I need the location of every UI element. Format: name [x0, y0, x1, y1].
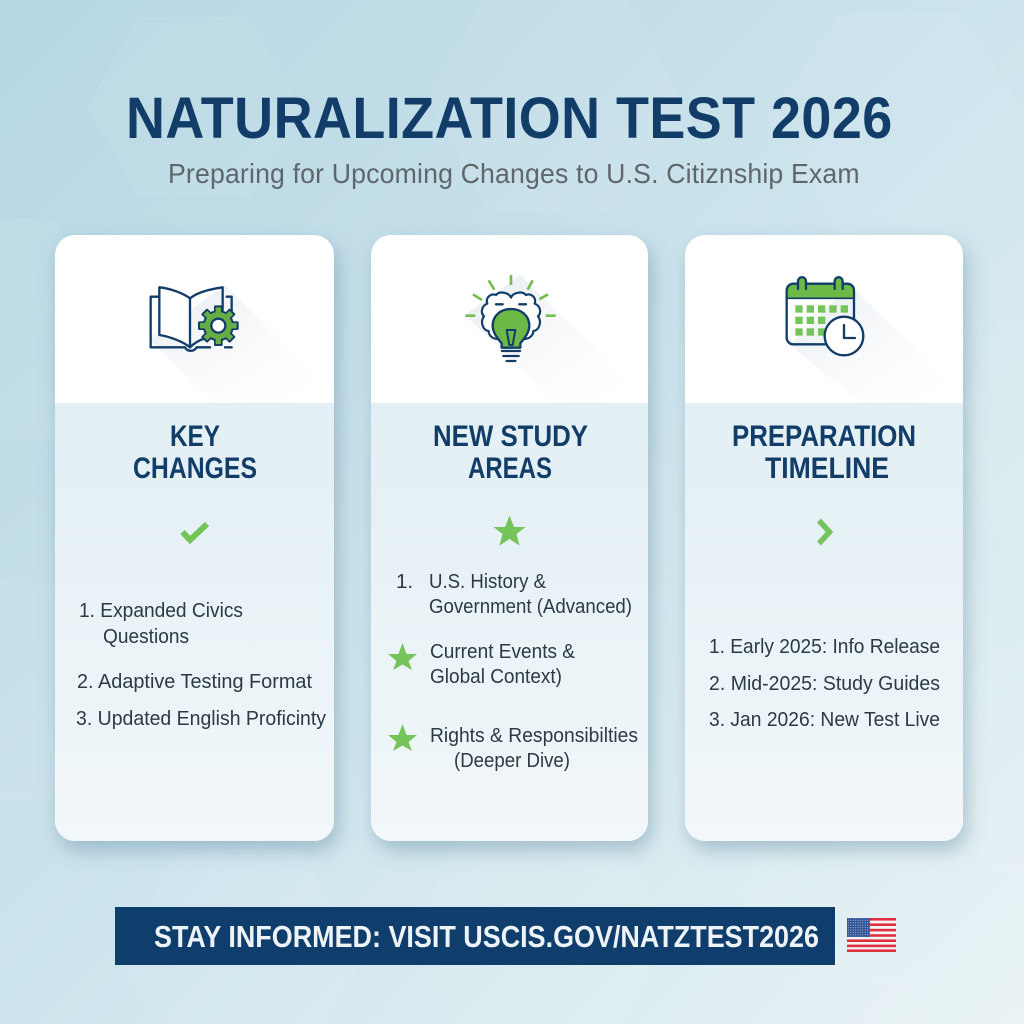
list: study areas: (Deeper Dive) — [454, 749, 570, 772]
list: key changes — [76, 599, 327, 730]
heading: preparation timeline: PREPARATION — [732, 420, 916, 453]
icon: chevron — [819, 520, 830, 544]
list: key changes: 3. Updated English Proficinty — [76, 707, 327, 730]
list: study areas — [396, 570, 638, 772]
list: study areas: 1. — [396, 570, 413, 593]
icon: calendar and clock — [787, 277, 863, 355]
list: timeline: 2. Mid-2025: Study Guides — [709, 672, 940, 695]
heading: new study areas: NEW STUDY — [433, 420, 588, 453]
icon: star — [494, 516, 526, 546]
list: key changes: Questions — [103, 625, 189, 648]
panel: preparation timeline — [685, 235, 963, 841]
heading: new study areas: AREAS — [468, 452, 552, 485]
icon: book and gear — [151, 287, 239, 351]
icon: us flag — [847, 918, 896, 952]
list: study areas: Current Events & — [430, 640, 575, 663]
heading: key changes: KEY — [170, 420, 220, 453]
icon: check mark — [182, 524, 207, 540]
heading: key changes — [133, 420, 257, 485]
list: study areas: Government (Advanced) — [429, 595, 632, 618]
title: NATURALIZATION TEST 2026 — [126, 85, 892, 150]
heading: new study areas — [433, 420, 588, 485]
list: timeline: 1. Early 2025: Info Release — [709, 635, 940, 658]
list: key changes: 1. Expanded Civics — [79, 599, 243, 622]
list: timeline: 3. Jan 2026: New Test Live — [709, 708, 940, 731]
panel: new study areas — [371, 235, 648, 841]
list: key changes: 2. Adaptive Testing Format — [77, 670, 312, 693]
list: timeline — [709, 635, 940, 731]
heading: preparation timeline: TIMELINE — [765, 452, 889, 485]
heading: key changes: CHANGES — [133, 452, 257, 485]
list: study areas: Rights & Responsibilties — [430, 724, 638, 747]
icon: bullet star 1 — [388, 643, 417, 670]
icon: bullet star 2 — [388, 724, 417, 751]
list: study areas: Global Context) — [430, 665, 562, 688]
list: study areas: U.S. History & — [429, 570, 546, 593]
icon: brain and light bulb — [465, 275, 556, 361]
panel: key changes — [55, 235, 334, 841]
subtitle: Preparing for Upcoming Changes to U.S. Citiznship Exam — [168, 158, 860, 189]
banner: STAY INFORMED: VISIT USCIS.GOV/NATZTEST2026 — [154, 919, 819, 954]
banner — [115, 907, 835, 965]
heading: preparation timeline — [732, 420, 916, 485]
